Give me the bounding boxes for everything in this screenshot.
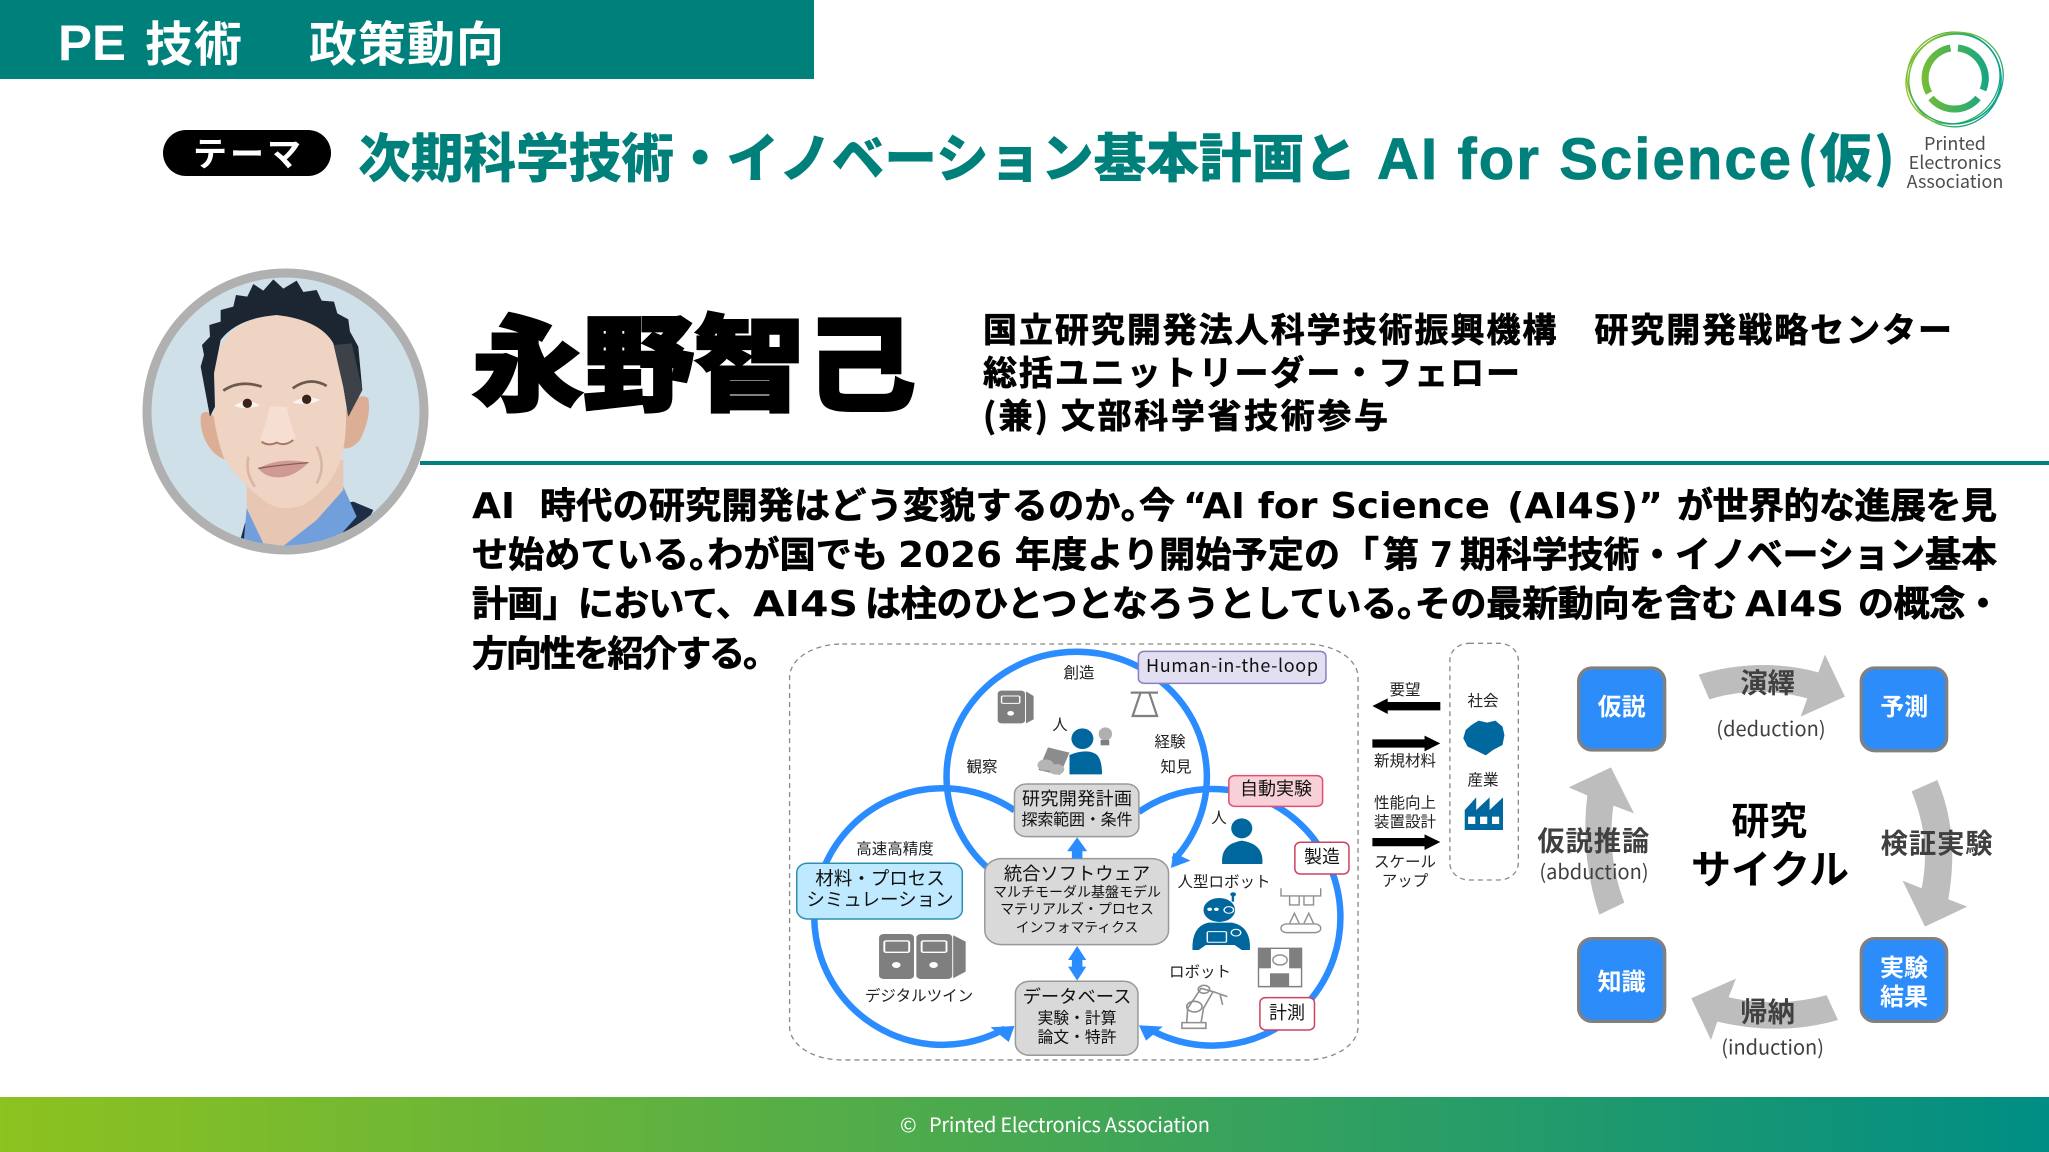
description text: AI4S [753,584,858,625]
right circle labels: 人 [1211,806,1227,828]
icon: server [998,691,1034,723]
blue loop rings [814,652,1340,1046]
right circle labels: ロボット [1169,960,1231,982]
box: database [1015,981,1138,1055]
box: integrated software: インフォマティクス [1016,916,1138,936]
ring arrowheads [991,853,1191,1042]
box: simulation: 材料・プロセス [815,865,945,891]
box: research plan [1014,784,1139,837]
top circle labels: 経験 [1154,730,1186,752]
description text [472,477,2001,677]
footer bar [0,1097,2049,1152]
arrow: request: 要望 [1389,678,1421,700]
arrow: performance, scale-up [1372,791,1440,891]
label: deduction [1716,660,1826,742]
box: database: データベース [1023,983,1131,1009]
theme label pill: テーマ [193,127,301,176]
logo: Printed Electronics Association: Printed [1924,130,1986,156]
arrow: performance, scale-up: スケール [1374,850,1436,872]
icon: measurement device [1258,948,1302,987]
speaker affiliation: (兼) 文部科学省技術参与 [983,389,1388,438]
arrow: performance, scale-up: アップ [1382,869,1429,891]
description text: 年度より開始予定の [1015,526,1340,578]
society and industry dashed frame [1450,643,1518,880]
label: Human-in-the-loop: Human-in-the-loop [1146,652,1318,678]
description text: が世界的な進展を見 [1677,477,1997,529]
logo: Printed Electronics Association [1889,15,2020,194]
speaker affiliation: 総括ユニットリーダー・フェロー [983,346,1520,395]
top circle labels: 観察 [966,755,998,777]
header bar [0,0,814,79]
description text: 時代の研究開発はどう変貌するのか。今 [540,477,1175,529]
label: manufacturing: 製造 [1304,843,1340,869]
top circle labels: 創造 [1063,661,1095,683]
icon: flask stand [1131,693,1158,716]
teal divider line [420,461,2049,465]
left circle labels [856,837,973,1006]
box: hypothesis: 仮説 [1598,687,1646,722]
description text: “AI for Science [1183,486,1490,527]
center label: research cycle: サイクル [1691,837,1849,895]
label: abduction [1537,818,1649,885]
speaker affiliation [983,303,1952,438]
icon: robot arm [1182,985,1227,1028]
theme title: 次期科学技術・イノベーション基本計画と [358,117,1357,193]
label: verification experiment: 検証実験 [1881,821,1993,861]
label: induction: 帰納 [1740,989,1795,1029]
right circle labels [1169,806,1271,982]
left circle labels: デジタルツイン [865,984,973,1006]
description text: (AI4S)” [1507,486,1663,527]
portrait photo [147,273,424,550]
label: automatic experiment [1229,775,1323,806]
header bar: PE [58,15,126,71]
icon: person with idea [1037,727,1112,775]
description text: AI [472,486,515,527]
header bar: 政策動向 [309,5,504,75]
label: induction: (induction) [1721,1031,1824,1060]
theme title: AI for Science [1377,127,1791,192]
speaker affiliation: 国立研究開発法人科学技術振興機構 研究開発戦略センター [983,303,1952,352]
description text: 期科学技術・イノベーション基本 [1460,526,1997,578]
box: research plan: 探索範囲・条件 [1022,806,1132,830]
top circle labels: 知見 [1160,755,1192,777]
header bar: 技術 [145,5,242,75]
arrow: performance, scale-up: 性能向上 [1374,791,1436,813]
box: integrated software: 統合ソフトウェア [1004,860,1150,886]
box: prediction: 予測 [1880,687,1928,722]
box: knowledge [1579,939,1665,1021]
top circle labels [966,661,1192,777]
arrow: request [1372,678,1440,714]
box: knowledge: 知識 [1598,962,1646,997]
AI for Science diagram [790,643,1518,1060]
arrow: software to plan [1067,837,1087,859]
cycle arrows [1569,655,1967,1040]
box: experimental results [1861,939,1947,1021]
label: abduction: 仮説推論 [1537,818,1649,858]
box: hypothesis [1579,668,1665,750]
speaker name: 永野智己 [472,281,916,432]
box: integrated software [985,859,1169,945]
description text: 7 [1430,535,1453,576]
description text: せ始めている。わが国でも [472,526,888,578]
label: manufacturing [1295,842,1349,874]
research cycle diagram [1537,655,1993,1060]
box: simulation: シミュレーション [806,886,954,912]
description text: AI4S [1745,584,1844,625]
description text: 「第 [1343,526,1419,578]
theme title [358,117,1895,193]
arrow: software and database [1068,946,1086,981]
description text: の概念・ [1858,575,2001,627]
arrow: performance, scale-up: 装置設計 [1374,810,1436,832]
description text: 計画」において、 [472,575,752,627]
center label: research cycle: 研究 [1731,790,1807,845]
right circle labels: 人型ロボット [1177,870,1271,892]
logo: Printed Electronics Association: Association [1907,168,2003,194]
box: prediction [1861,668,1947,751]
description text: 2026 [898,535,1002,576]
arrow: new materials [1372,736,1440,771]
theme title: (仮) [1797,117,1895,193]
theme label pill [163,127,331,176]
box: simulation [797,863,962,919]
icon: digital twin servers [879,934,966,979]
icon: humanoid robot [1192,892,1250,950]
box: integrated software: マテリアルズ・プロセス [1000,899,1154,919]
label: measurement [1260,998,1314,1030]
label: deduction: (deduction) [1716,713,1826,742]
left circle labels: 高速高精度 [856,837,934,859]
label: induction [1721,989,1824,1060]
box: database: 論文・特許 [1038,1024,1117,1048]
footer bar: Printed Electronics Association [929,1109,1210,1138]
arrow: new materials: 新規材料 [1374,749,1436,771]
logo: Printed Electronics Association: Electronics [1909,149,2001,175]
label: deduction: 演繹 [1740,660,1795,700]
label: automatic experiment: 自動実験 [1240,775,1312,801]
box: integrated software: マルチモーダル基盤モデル [993,882,1161,902]
diagram outer dashed frame [790,644,1358,1060]
icon: manufacturing machine [1281,888,1321,933]
description text: 方向性を紹介する。 [472,625,779,677]
top circle labels: 人 [1052,713,1068,735]
box: experimental results: 実験 [1880,948,1928,983]
box: database: 実験・計算 [1038,1006,1116,1028]
description text: は柱のひとつとなろうとしている。その最新動向を含む [865,575,1737,627]
footer bar: © [900,1109,917,1138]
center label: research cycle [1691,790,1849,895]
icon: person [1222,818,1262,864]
box: research plan: 研究開発計画 [1022,785,1132,811]
label: abduction: (abduction) [1539,856,1649,885]
label: measurement: 計測 [1269,999,1305,1025]
society and industry dashed frame: 社会 [1467,689,1499,711]
society and industry dashed frame: 産業 [1467,768,1499,790]
box: experimental results: 結果 [1880,977,1928,1012]
